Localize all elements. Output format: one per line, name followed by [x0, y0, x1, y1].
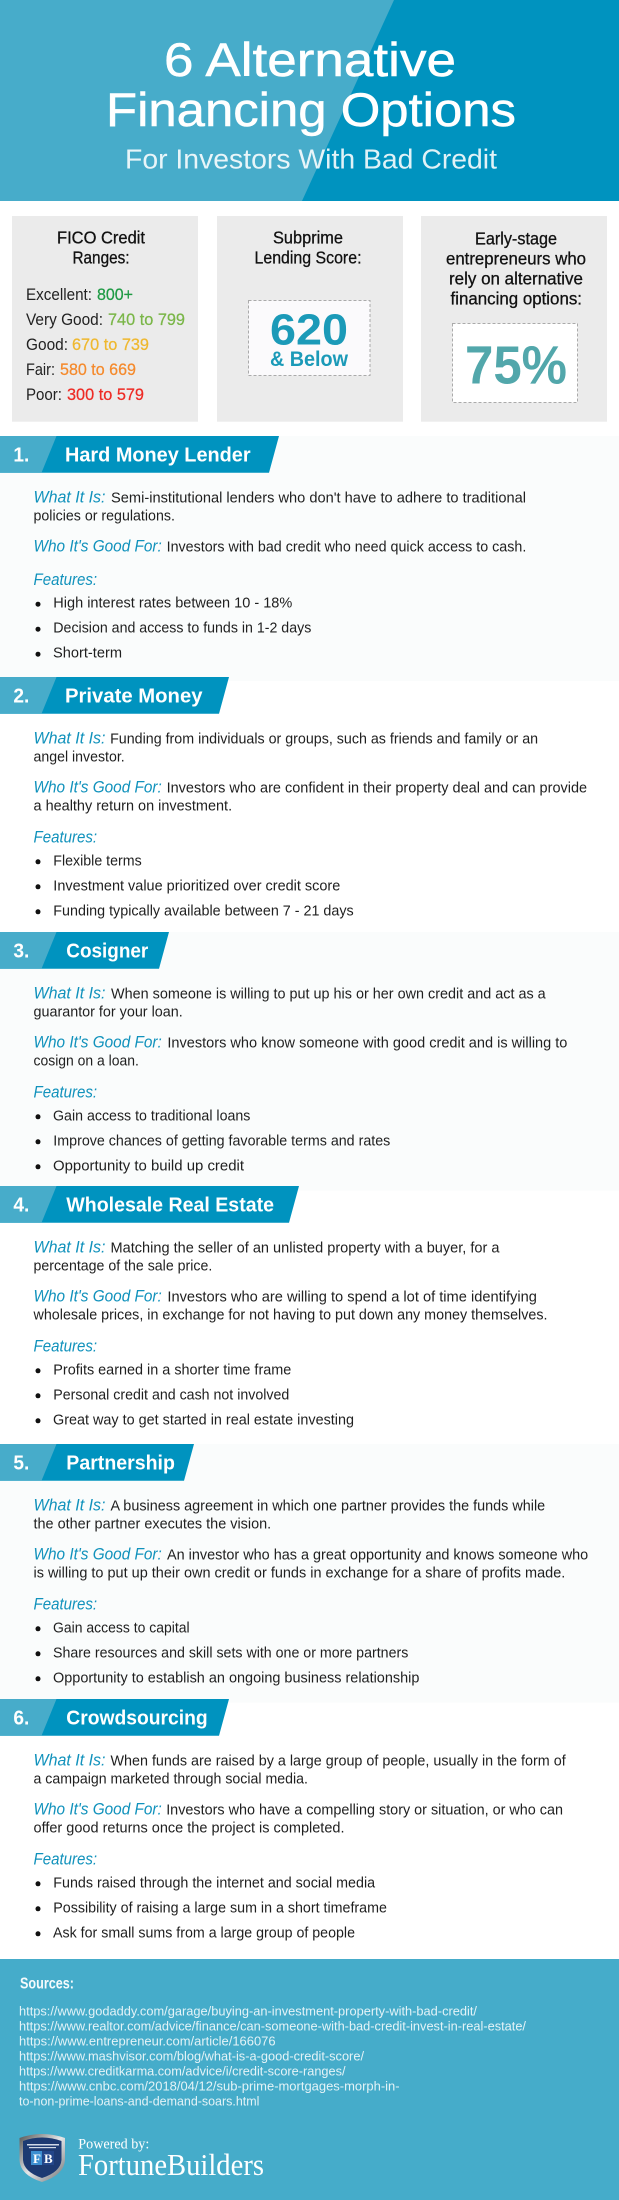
- heading banner: [0, 1186, 299, 1223]
- features list: Opportunity to establish an ongoing business relationship: [53, 1669, 419, 1686]
- features list: Improve chances of getting favorable terms and rates: [53, 1132, 390, 1149]
- text block: who it's good for: Who It's Good For:: [34, 1800, 162, 1819]
- text block: who it's good for: Investors who have a compelling story or situation, or who can: [166, 1802, 563, 1819]
- text block: what it is: policies or regulations.: [34, 508, 175, 525]
- text block: what it is: A business agreement in which one partner provides the funds while: [110, 1497, 545, 1514]
- panel: FICO credit ranges: 800+: [97, 285, 133, 304]
- features list: [34, 1337, 354, 1428]
- heading banner: [0, 677, 229, 714]
- text block: what it is: [34, 487, 526, 525]
- sources list: https://www.realtor.com/advice/finance/can-someone-with-bad-credit-invest-in-real-estate/: [19, 2019, 526, 2034]
- panel: FICO credit ranges: Fair:: [26, 360, 55, 379]
- text block: who it's good for: Who It's Good For:: [34, 1287, 162, 1306]
- text block: who it's good for: [34, 778, 587, 815]
- panel: early-stage entrepreneurs: entrepreneurs who: [446, 248, 586, 268]
- callout: 620 and below: [248, 300, 370, 376]
- sources list: https://www.mashvisor.com/blog/what-is-a-good-credit-score/: [19, 2049, 364, 2064]
- text block: what it is: the other partner executes the vision.: [34, 1516, 271, 1533]
- panel: FICO credit ranges: Good:: [26, 335, 68, 354]
- sources list: https://www.cnbc.com/2018/04/12/sub-prime-mortgages-morph-in-: [19, 2079, 400, 2094]
- heading banner: 2.: [13, 685, 29, 708]
- text block: who it's good for: [34, 1033, 567, 1070]
- text block: what it is: [34, 1237, 500, 1275]
- heading banner: Hard Money Lender: [65, 444, 251, 467]
- features list: [34, 1595, 419, 1686]
- features list: Funds raised through the internet and social media: [53, 1874, 376, 1891]
- panel: FICO credit ranges: [12, 216, 198, 422]
- text block: who it's good for: Who It's Good For:: [34, 1033, 162, 1052]
- panel: early-stage entrepreneurs: [421, 216, 607, 422]
- panel: FICO credit ranges: 740 to 799: [108, 310, 185, 329]
- panel: 1 hard money lender: [0, 436, 619, 681]
- text block: what it is: What It Is:: [34, 983, 106, 1002]
- features list: [34, 1850, 387, 1941]
- features list: Features:: [34, 1595, 97, 1614]
- features list: Investment value prioritized over credit score: [53, 877, 340, 894]
- features list: Share resources and skill sets with one or more partners: [53, 1644, 408, 1661]
- text block: who it's good for: wholesale prices, in exchange for not having to put down any money themselves.: [33, 1307, 547, 1324]
- features list: High interest rates between 10 - 18%: [53, 595, 292, 612]
- panel: FICO credit ranges: 580 to 669: [60, 360, 136, 379]
- text block: what it is: What It Is:: [34, 1495, 106, 1514]
- subtitle: For Investors With Bad Credit: [125, 144, 497, 175]
- heading banner: [0, 1699, 229, 1736]
- footer panel: [0, 1959, 619, 2200]
- panel: subprime lending score: Subprime: [273, 227, 343, 247]
- sources list: to-non-prime-loans-and-demand-soars.html: [19, 2094, 259, 2108]
- heading banner: Crowdsourcing: [66, 1707, 208, 1730]
- features list: Ask for small sums from a large group of people: [53, 1924, 355, 1941]
- text block: who it's good for: a healthy return on investment.: [34, 798, 232, 815]
- panel: early-stage entrepreneurs: financing options:: [450, 288, 582, 308]
- title: 6 Alternative: [164, 33, 456, 86]
- text block: who it's good for: cosign on a loan.: [34, 1053, 139, 1070]
- text block: who it's good for: is willing to put up their own credit or funds in exchange for a share of profits made.: [34, 1565, 565, 1582]
- text block: who it's good for: offer good returns once the project is completed.: [34, 1820, 344, 1837]
- panel: FICO credit ranges: 300 to 579: [67, 385, 144, 404]
- features list: Gain access to traditional loans: [53, 1107, 250, 1124]
- features list: Features:: [34, 1083, 97, 1102]
- text block: what it is: [34, 983, 546, 1021]
- panel: 3 cosigner: [0, 932, 619, 1191]
- features list: Opportunity to build up credit: [53, 1157, 245, 1174]
- title: [106, 33, 516, 136]
- text block: who it's good for: Investors with bad credit who need quick access to cash.: [167, 539, 526, 556]
- text block: who it's good for: [33, 1287, 547, 1324]
- panel: FICO credit ranges: FICO Credit: [57, 227, 145, 247]
- powered by credit: FortuneBuilders: [78, 2147, 264, 2182]
- heading banner: Partnership: [66, 1452, 175, 1475]
- text block: what it is: Matching the seller of an unlisted property with a buyer, for a: [110, 1239, 500, 1256]
- panel: subprime lending score: [217, 216, 403, 422]
- text block: what it is: angel investor.: [34, 749, 125, 766]
- heading banner: 1.: [13, 444, 29, 467]
- icon: Fortune Builders shield logo: [20, 2134, 65, 2182]
- text block: what it is: What It Is:: [34, 487, 106, 506]
- panel: 4 wholesale real estate: [0, 1186, 548, 1428]
- text block: who it's good for: [34, 1800, 563, 1837]
- text block: what it is: What It Is:: [34, 1237, 106, 1256]
- text block: what it is: Funding from individuals or groups, such as friends and family or an: [110, 730, 538, 747]
- callout: 620 and below: 620: [270, 305, 348, 354]
- header banner: [0, 0, 619, 201]
- panel: FICO credit ranges: 670 to 739: [72, 335, 149, 354]
- features list: [34, 1083, 390, 1174]
- sources list: https://www.entrepreneur.com/article/166076: [19, 2034, 276, 2049]
- icon: Fortune Builders shield logo: F: [33, 2151, 41, 2166]
- features list: [34, 570, 311, 662]
- panel: FICO credit ranges: Ranges:: [72, 247, 130, 267]
- panel: early-stage entrepreneurs: Early-stage: [475, 228, 557, 248]
- text block: what it is: guarantor for your loan.: [34, 1004, 183, 1021]
- text block: what it is: When funds are raised by a large group of people, usually in the form of: [110, 1752, 566, 1769]
- sources list: https://www.creditkarma.com/advice/i/credit-score-ranges/: [19, 2064, 346, 2079]
- callout: 75 percent: 75%: [465, 335, 567, 395]
- text block: who it's good for: Who It's Good For:: [34, 778, 162, 797]
- features list: Personal credit and cash not involved: [53, 1386, 289, 1403]
- text block: who it's good for: [34, 1545, 588, 1582]
- features list: Flexible terms: [53, 852, 142, 869]
- callout: 620 and below: & Below: [270, 348, 349, 371]
- features list: Gain access to capital: [53, 1619, 190, 1636]
- text block: who it's good for: [34, 537, 526, 556]
- panel: FICO credit ranges: Very Good:: [26, 310, 103, 329]
- features list: Possibility of raising a large sum in a short timeframe: [53, 1899, 387, 1916]
- heading banner: 6.: [13, 1707, 29, 1730]
- features list: Features:: [34, 1337, 97, 1356]
- sources list: [19, 2004, 526, 2108]
- icon: Fortune Builders shield logo: B: [44, 2151, 53, 2166]
- panel: 5 partnership: [0, 1444, 619, 1703]
- text block: what it is: What It Is:: [34, 728, 106, 747]
- heading banner: [0, 1444, 194, 1481]
- heading banner: Cosigner: [66, 940, 148, 963]
- heading banner: 3.: [13, 940, 29, 963]
- text block: who it's good for: Investors who are willing to spend a lot of time identifying: [167, 1289, 537, 1306]
- title: Financing Options: [106, 83, 516, 136]
- text block: who it's good for: An investor who has a great opportunity and knows someone who: [167, 1547, 588, 1564]
- panel: FICO credit ranges: Excellent:: [26, 285, 92, 304]
- features list: Profits earned in a shorter time frame: [53, 1361, 291, 1378]
- text block: what it is: [34, 1750, 566, 1788]
- features list: [34, 828, 354, 919]
- panel: 6 crowdsourcing: [0, 1699, 566, 1941]
- powered by credit: Powered by:: [78, 2137, 149, 2153]
- heading banner: [0, 932, 169, 969]
- heading banner: Wholesale Real Estate: [66, 1194, 274, 1217]
- features list: Features:: [34, 828, 97, 847]
- callout: 75 percent: [452, 324, 578, 402]
- heading banner: 4.: [13, 1194, 29, 1217]
- text block: what it is: What It Is:: [34, 1750, 106, 1769]
- text block: what it is: [34, 728, 538, 766]
- text block: who it's good for: Who It's Good For:: [34, 537, 162, 556]
- text block: what it is: [34, 1495, 545, 1533]
- features list: Features:: [34, 1850, 97, 1869]
- text block: who it's good for: Investors who know someone with good credit and is willing to: [167, 1035, 567, 1052]
- heading banner: 5.: [13, 1452, 29, 1475]
- panel: early-stage entrepreneurs: rely on alternative: [449, 268, 583, 288]
- heading banner: [0, 436, 279, 473]
- features list: Decision and access to funds in 1-2 days: [53, 620, 311, 637]
- text block: what it is: a campaign marketed through social media.: [34, 1771, 308, 1788]
- panel: FICO credit ranges: Poor:: [26, 385, 62, 404]
- text block: who it's good for: Investors who are confident in their property deal and can provide: [167, 780, 587, 797]
- features list: Short-term: [53, 645, 122, 662]
- sources heading: Sources:: [20, 1975, 74, 1992]
- sources list: https://www.godaddy.com/garage/buying-an-investment-property-with-bad-credit/: [19, 2004, 477, 2019]
- features list: Features:: [34, 570, 97, 589]
- text block: what it is: percentage of the sale price.: [34, 1258, 212, 1275]
- text block: what it is: When someone is willing to put up his or her own credit and act as a: [111, 985, 546, 1002]
- text block: who it's good for: Who It's Good For:: [34, 1545, 162, 1564]
- features list: Funding typically available between 7 - 21 days: [53, 902, 354, 919]
- heading banner: Private Money: [65, 685, 203, 708]
- panel: subprime lending score: Lending Score:: [254, 247, 362, 267]
- text block: what it is: Semi-institutional lenders who don't have to adhere to traditional: [111, 489, 526, 506]
- panel: 2 private money: [0, 677, 587, 919]
- features list: Great way to get started in real estate investing: [53, 1411, 354, 1428]
